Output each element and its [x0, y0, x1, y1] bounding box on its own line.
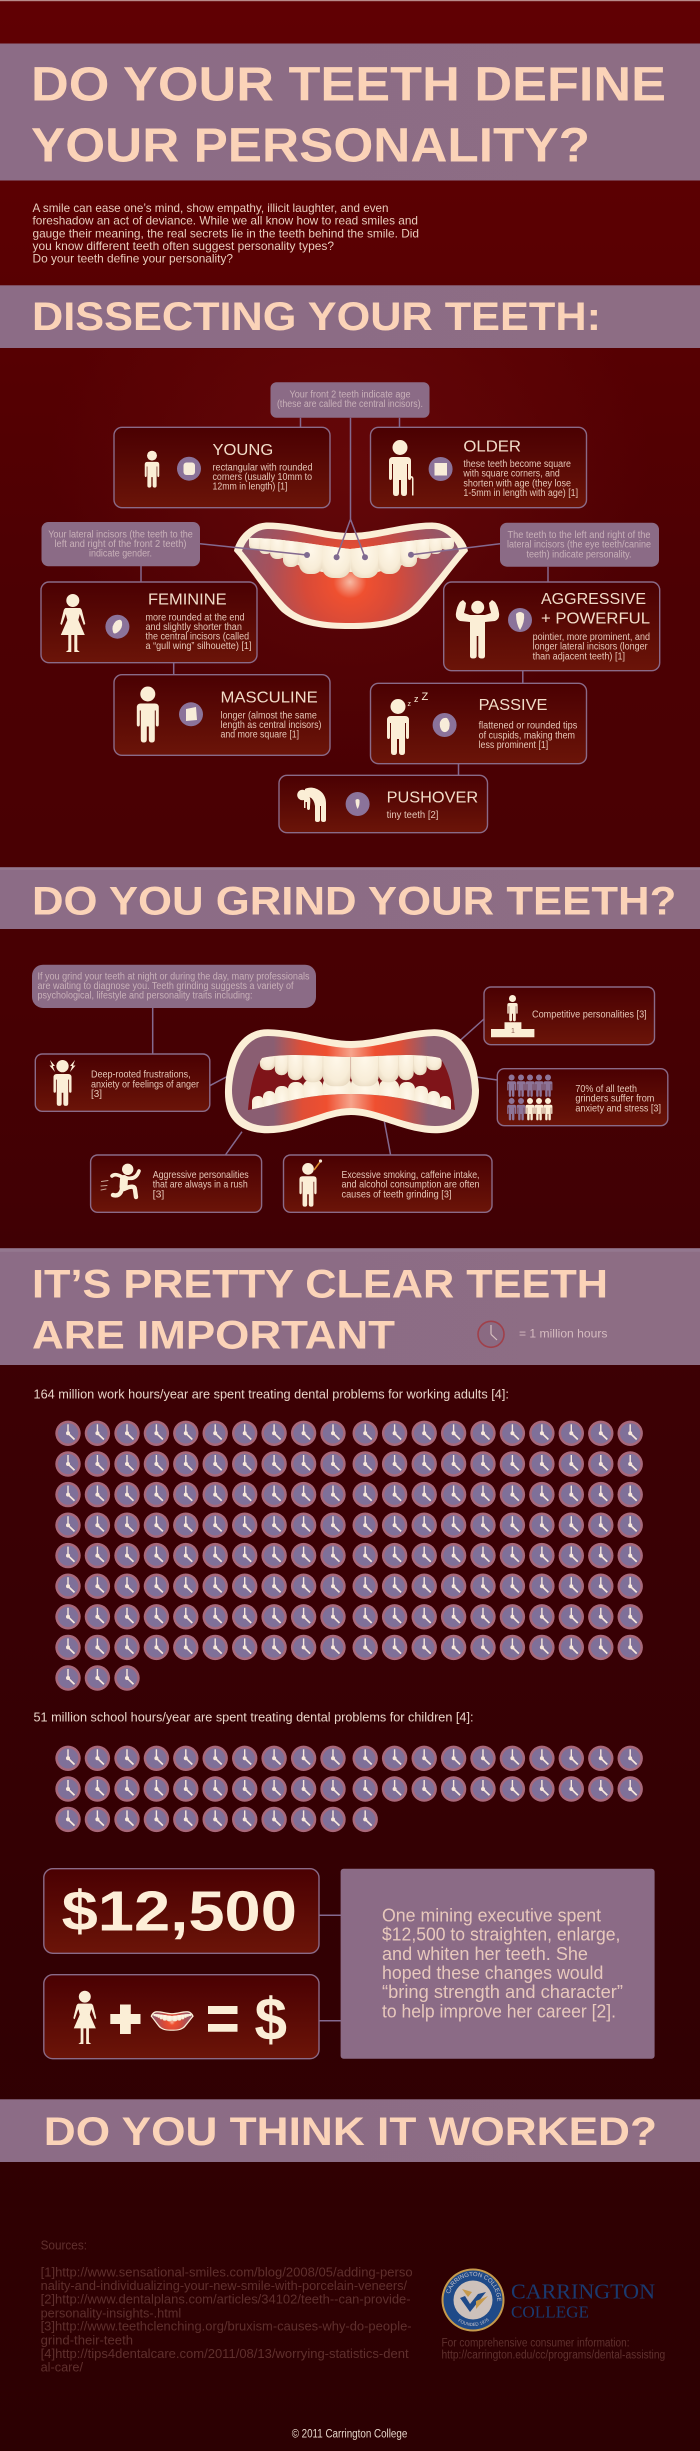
legend: clock equals one million hours: = 1 million hours — [519, 1327, 607, 1341]
logo: Carrington College seal: CARRINGTON COLLEGE — [446, 2272, 502, 2302]
text: older: shorten with age (they lose — [463, 478, 571, 489]
callout: lateral incisors — [42, 522, 200, 566]
sources: [4]http://tips4dentalcare.com/2011/08/13/worrying-statistics-dent — [41, 2347, 409, 2361]
sources: personality-insights-.html — [41, 2306, 181, 2320]
callout: canine teeth: lateral incisors (the eye teeth/canine — [507, 540, 651, 551]
text: feminine: and slightly shorter than — [146, 622, 242, 633]
icon: strong man — [456, 600, 499, 658]
text: passive: less prominent [1] — [479, 740, 548, 751]
title: YOUR PERSONALITY? — [31, 119, 590, 172]
title — [0, 44, 700, 180]
sources: nality-and-individualizing-your-new-smile-with-porcelain-veneers/ — [41, 2279, 408, 2293]
icon: running man — [101, 1164, 139, 1197]
panel: older — [370, 427, 586, 508]
logo wordmark: COLLEGE — [511, 2302, 589, 2321]
sources: [2]http://www.dentalplans.com/articles/34102/teeth--can-provide- — [41, 2293, 411, 2307]
text: rush — [153, 1170, 249, 1200]
icon: young person — [145, 451, 159, 488]
text: frustrations: anxiety or feelings of anger — [91, 1079, 200, 1090]
text: aggressive — [533, 632, 650, 662]
icon: sleepy man: Z — [422, 691, 428, 703]
connector lines: grind — [153, 1008, 497, 1155]
icon: older person with cane — [389, 440, 414, 496]
text: passive: of cuspids, making them — [479, 730, 575, 741]
text: frustrations: [3] — [91, 1089, 102, 1100]
panel: young — [114, 427, 330, 508]
text: smoking: Excessive smoking, caffeine intake, — [342, 1170, 480, 1181]
text: young: 12mm in length) [1] — [212, 482, 288, 493]
panel: aggressive and powerful — [444, 582, 660, 671]
callout: mining executive: “bring strength and character” — [382, 1981, 623, 2002]
icon: dollar sign: $ — [254, 1986, 287, 2053]
sources: [3]http://www.teethclenching.org/bruxism-causes-why-do-people- — [41, 2320, 412, 2334]
sources: Sources: — [41, 2238, 87, 2252]
sources: al-care/ — [41, 2360, 84, 2374]
callout: canine teeth — [500, 523, 659, 567]
icon: woman — [73, 1991, 96, 2044]
text: frustrations: Deep-rooted frustrations, — [91, 1070, 191, 1081]
heading: passive: PASSIVE — [479, 697, 547, 714]
icon: plus — [110, 2004, 140, 2034]
intro text: you know different teeth often suggest personality types? — [32, 239, 334, 253]
heading: aggressive and powerful: + POWERFUL — [541, 610, 650, 627]
upper teeth — [260, 1055, 442, 1086]
panel: smoking — [284, 1155, 492, 1212]
icon: sleepy man: z — [408, 701, 412, 708]
text: feminine: more rounded at the end — [146, 612, 244, 623]
icon: man — [137, 686, 159, 742]
text: older: these teeth become square — [463, 459, 571, 470]
callout: lateral incisors: indicate gender. — [89, 549, 152, 560]
text: feminine — [146, 612, 252, 652]
text: 70 percent — [575, 1084, 661, 1114]
number on podium: 1 — [511, 1028, 515, 1035]
intro text: Do your teeth define your personality? — [32, 252, 233, 266]
clock pictogram: children — [55, 1746, 643, 1832]
callout: grinding intro: If you grind your teeth at night or during the day, many professionals — [38, 971, 310, 982]
panel: masculine — [114, 675, 330, 755]
callout: mining executive — [341, 1869, 655, 2059]
heading: important: IT’S PRETTY CLEAR TEETH — [32, 1262, 608, 1306]
callout: mining executive: One mining executive spent — [382, 1905, 601, 1926]
text: frustrations — [91, 1070, 200, 1100]
heading: masculine: MASCULINE — [220, 690, 318, 707]
callout: lateral incisors: left and right of the front 2 teeth) — [54, 539, 186, 550]
text: masculine: and more square [1] — [220, 730, 299, 741]
callout: mining executive: $12,500 to straighten, enlarge, — [382, 1924, 620, 1945]
heading: pushover: PUSHOVER — [387, 790, 478, 807]
callout: front teeth: (these are called the central incisors). — [277, 399, 423, 410]
icon: pointed tooth — [508, 608, 532, 632]
heading: dissecting: DISSECTING YOUR TEETH: — [32, 295, 601, 339]
panel: rush — [91, 1155, 262, 1212]
icon: sleepy man — [387, 691, 428, 755]
logo: Carrington College seal — [442, 2268, 504, 2332]
text: older — [463, 459, 578, 499]
icon: older tooth — [429, 457, 453, 481]
heading: young: YOUNG — [212, 442, 273, 459]
callout: canine teeth: teeth) indicate personality. — [526, 549, 632, 560]
text: aggressive: than adjacent teeth) [1] — [533, 651, 625, 662]
grinding mouth — [225, 1029, 479, 1133]
intro text: gauge their meaning, the real secrets lie in the teeth behind the smile. Did — [32, 226, 419, 240]
heading: grind — [0, 867, 700, 929]
text: 70 percent: grinders suffer from — [575, 1094, 654, 1105]
heading: aggressive and powerful — [541, 591, 650, 627]
text: 70 percent: anxiety and stress [3] — [575, 1103, 661, 1114]
text: passive: flattened or rounded tips — [479, 721, 577, 732]
intro text: A smile can ease one’s mind, show empathy, illicit laughter, and even — [32, 201, 388, 215]
text: smoking: and alcohol consumption are often — [342, 1180, 480, 1191]
text: smoking — [342, 1170, 480, 1200]
heading: do you think it worked: DO YOU THINK IT WORKED? — [44, 2110, 657, 2154]
callout: mining executive: and whiten her teeth. She — [382, 1943, 588, 1964]
sources: grind-their-teeth — [41, 2333, 133, 2347]
legend: clock equals one million hours — [478, 1321, 607, 1347]
callout: grinding intro: psychological, lifestyle and personality traits including: — [38, 991, 252, 1002]
heading: feminine: FEMININE — [148, 592, 227, 609]
text: aggressive: longer lateral incisors (longer — [533, 642, 648, 653]
text: school hours: 51 million school hours/year are spent treating dental problems for children [4]: — [34, 1711, 474, 1725]
sources — [41, 2238, 413, 2374]
callout: mining executive: to help improve her career [2]. — [382, 2000, 616, 2021]
text: masculine — [220, 710, 322, 741]
heading: dissecting — [0, 285, 700, 348]
callout: grinding intro — [32, 965, 316, 1008]
text: 70 percent: 70% of all teeth — [575, 1084, 637, 1095]
panel: cost figure — [44, 1869, 319, 1953]
text: older: with square corners, and — [463, 469, 560, 480]
icon: woman — [60, 594, 85, 652]
text: older: 1-5mm in length with age) [1] — [463, 488, 578, 499]
clock pictogram: adults — [55, 1421, 643, 1691]
icon: small mouth — [151, 2011, 194, 2031]
heading: grind: DO YOU GRIND YOUR TEETH? — [32, 879, 676, 923]
heading: aggressive and powerful: AGGRESSIVE — [541, 591, 646, 608]
callout: front teeth — [270, 382, 430, 418]
pointer lines into teeth — [200, 418, 500, 560]
connector lines: upper — [141, 418, 548, 775]
icon: flat tooth — [433, 713, 457, 737]
panel: equation — [44, 1975, 319, 2059]
icon: man on podium — [491, 995, 534, 1037]
sources: [1]http://www.sensational-smiles.com/blog/2008/05/adding-perso — [41, 2266, 413, 2280]
text: young — [212, 462, 312, 493]
text: young: rectangular with rounded — [212, 462, 312, 473]
text: competitive: Competitive personalities [3] — [532, 1010, 647, 1021]
callout: grinding intro: are waiting to diagnose you. Teeth grinding suggests a variety of — [38, 981, 294, 992]
icon: man smoking — [299, 1159, 322, 1207]
heading: important: ARE IMPORTANT — [32, 1313, 395, 1357]
callout: front teeth: Your front 2 teeth indicate age — [290, 390, 411, 401]
icon: feminine tooth — [105, 615, 129, 639]
lower teeth — [252, 1080, 451, 1110]
panel: passive — [370, 683, 586, 764]
logo: Carrington College seal: FOUNDED 1976 — [458, 2318, 489, 2326]
icon: sleepy man: z — [414, 694, 419, 704]
intro text — [32, 201, 419, 266]
logo wordmark: CARRINGTON — [511, 2280, 655, 2304]
panel: cost figure: $12,500 — [62, 1880, 297, 1944]
title: DO YOUR TEETH DEFINE — [31, 59, 666, 112]
logo wordmark — [511, 2280, 655, 2321]
heading: do you think it worked — [0, 2099, 700, 2162]
panel: competitive — [484, 987, 654, 1045]
panel: pushover — [279, 775, 488, 833]
icon: bowing man — [297, 788, 326, 822]
text: work hours: 164 million work hours/year are spent treating dental problems for working adults [4]: — [34, 1387, 509, 1401]
intro text: foreshadow an act of deviance. While we all know how to read smiles and — [32, 214, 418, 228]
consumer information — [442, 2338, 665, 2362]
heading: important — [0, 1248, 700, 1365]
callout: canine teeth: The teeth to the left and right of the — [508, 530, 651, 541]
consumer information: For comprehensive consumer information: — [442, 2338, 630, 2350]
icon grid: ten people — [507, 1074, 552, 1120]
text: feminine: a “gull wing” silhouette) [1] — [146, 641, 252, 652]
icon: equals — [208, 2006, 238, 2032]
text: passive — [479, 721, 577, 751]
smiling mouth — [234, 522, 468, 629]
text: rush: [3] — [153, 1189, 164, 1200]
callout: mining executive: hoped these changes would — [382, 1962, 603, 1983]
text: feminine: the central incisors (called — [146, 632, 249, 643]
heading: older: OLDER — [463, 439, 521, 456]
text: masculine: length as central incisors) — [220, 720, 322, 731]
icon: masculine tooth — [179, 702, 203, 726]
text: smoking: causes of teeth grinding [3] — [342, 1189, 452, 1200]
text: young: corners (usually 10mm to — [212, 472, 312, 483]
icon: tiny tooth — [346, 792, 370, 816]
callout: lateral incisors: Your lateral incisors (the teeth to the — [48, 529, 193, 540]
text: rush: Aggressive personalities — [153, 1170, 249, 1181]
text: pushover: tiny teeth [2] — [387, 810, 439, 821]
panel: feminine — [41, 582, 257, 663]
connector lines: cost — [319, 1915, 341, 2021]
consumer information: http://carrington.edu/cc/programs/dental-assisting — [442, 2350, 665, 2362]
icon: young tooth — [177, 457, 201, 481]
panel: frustrations — [35, 1054, 210, 1111]
copyright: © 2011 Carrington College — [292, 2429, 407, 2441]
text: rush: that are always in a rush — [153, 1180, 248, 1191]
panel: 70 percent anxiety — [497, 1069, 668, 1126]
text: masculine: longer (almost the same — [220, 710, 317, 721]
icon: angry man with bolts — [50, 1060, 76, 1106]
text: aggressive: pointier, more prominent, and — [533, 632, 650, 643]
